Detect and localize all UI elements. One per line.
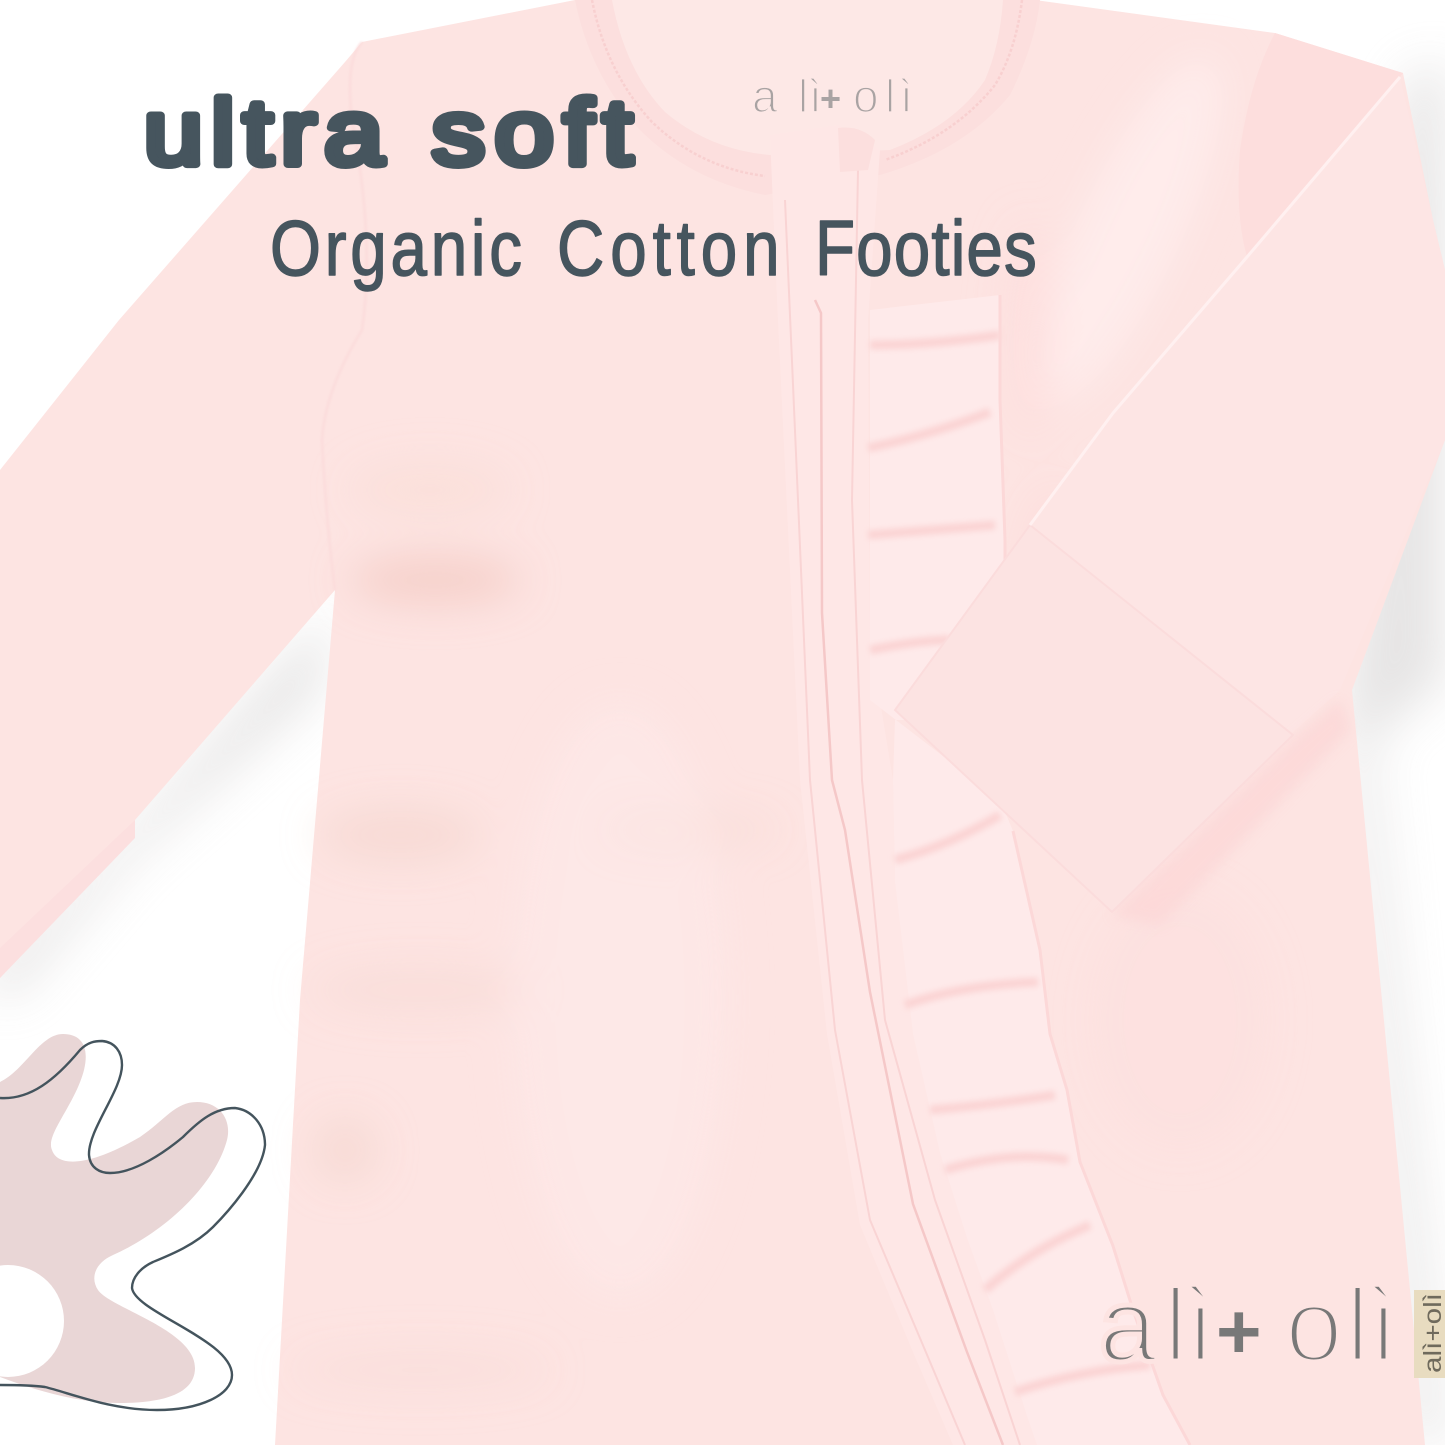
ruffle hem [1000, 295, 1190, 1445]
soft fabric shading [290, 37, 1270, 1392]
woven label [1414, 1290, 1445, 1378]
blob fill [0, 1034, 228, 1403]
neck logo plus: + [820, 78, 841, 119]
logo letters: alì olì [1099, 1268, 1398, 1384]
cuff [895, 525, 1293, 912]
blob outline [0, 1041, 265, 1410]
subtitle: Organic Cotton Footies [270, 206, 1037, 292]
title word: soft: soft [432, 81, 632, 184]
cuff shadow [1112, 700, 1350, 925]
brand logo [1099, 1268, 1398, 1384]
ruffle fold shadows [868, 335, 1150, 1392]
ruffle [870, 295, 1190, 1445]
subtitle word: Footies: Footies [815, 206, 1037, 292]
zipper pull tab [838, 128, 875, 172]
zipper slit [815, 300, 1003, 1445]
inner neck [612, 0, 1003, 155]
logo plus: + [1216, 1287, 1262, 1375]
collar [575, 0, 1040, 195]
placket stitching [785, 170, 1020, 1445]
subtitle word: Organic: Organic [270, 206, 522, 292]
label tag [1414, 1290, 1445, 1378]
subtitle word: Cotton: Cotton [557, 206, 780, 292]
decorative blob [0, 1034, 265, 1410]
left cuff edge [0, 820, 135, 978]
zipper placket [770, 125, 1037, 1445]
fold line [1030, 77, 1400, 525]
armhole panel [1239, 33, 1403, 257]
underarm seam [322, 42, 367, 590]
right sleeve [1030, 77, 1445, 735]
neck label logo [752, 70, 913, 122]
title: ultra soft [144, 81, 632, 184]
neck logo letters: alì olì [752, 70, 913, 122]
title word: ultra: ultra [144, 81, 384, 184]
collar stitching [592, 0, 1022, 176]
blob hole [0, 1265, 64, 1377]
